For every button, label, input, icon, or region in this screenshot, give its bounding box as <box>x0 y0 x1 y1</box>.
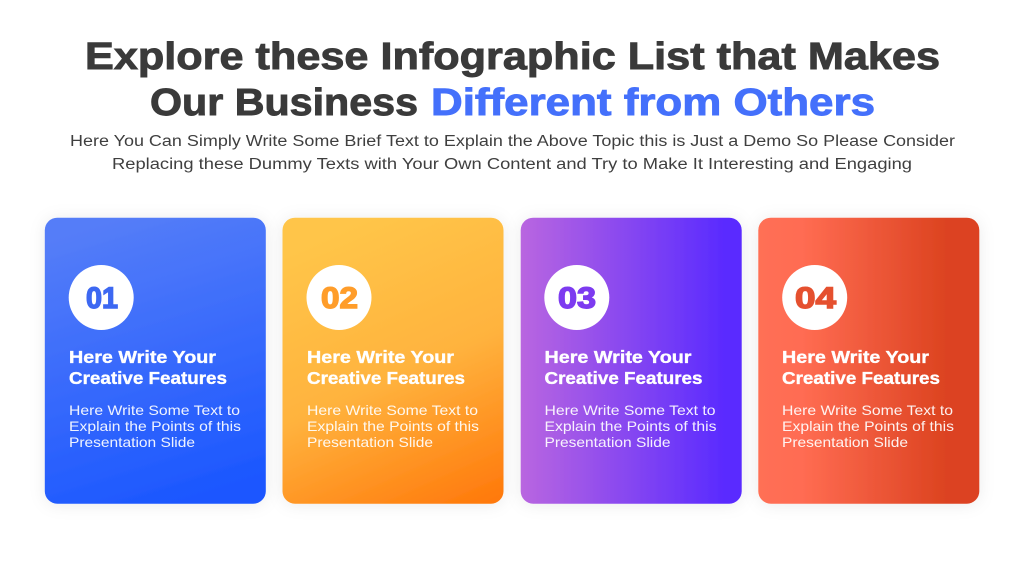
heading: card 01 <box>69 347 227 388</box>
subtitle text: Replacing these Dummy Texts with Your Own Content and Try to Make It Interesting and Engaging <box>112 156 912 173</box>
heading: card 02: Here Write Your <box>307 347 454 367</box>
title: Explore these Infographic List that Makes <box>85 36 940 78</box>
text block: card 03: Explain the Points of this <box>544 418 716 434</box>
subtitle text: Here You Can Simply Write Some Brief Text to Explain the Above Topic this is Just a Demo So Please Consider <box>70 133 955 150</box>
title <box>85 36 940 124</box>
subtitle text <box>70 133 955 173</box>
text block: card 04: Here Write Some Text to <box>782 402 953 418</box>
heading: card 04: Here Write Your <box>782 347 929 367</box>
icon: number badge 02: 02 <box>321 282 358 315</box>
text block: card 02: Presentation Slide <box>307 434 433 450</box>
icon: number badge 03 <box>544 265 609 330</box>
icon: number badge 03: 03 <box>558 282 596 315</box>
text block: card 04: Presentation Slide <box>782 434 908 450</box>
icon: number badge 04 <box>782 265 847 330</box>
heading: card 04: Creative Features <box>782 368 940 388</box>
icon: number badge 01: 01 <box>86 282 118 315</box>
text block: card 04: Explain the Points of this <box>782 418 954 434</box>
icon: number badge 01 <box>69 265 134 330</box>
icon: number badge 02 <box>306 265 372 330</box>
text block: card 02 <box>307 402 479 450</box>
title: Our Business <box>150 82 418 124</box>
panel: card 04 red <box>758 218 979 504</box>
panel: card 02 orange <box>282 218 504 504</box>
text block: card 03: Here Write Some Text to <box>544 402 716 418</box>
heading: card 03: Here Write Your <box>544 347 692 367</box>
text block: card 02: Explain the Points of this <box>307 418 479 434</box>
panel: card 01 blue <box>45 218 266 504</box>
heading: card 03 <box>544 347 703 388</box>
heading: card 02 <box>307 347 465 388</box>
text block: card 02: Here Write Some Text to <box>307 402 478 418</box>
heading: card 01: Creative Features <box>69 368 227 388</box>
text block: card 01 <box>69 402 241 450</box>
text block: card 04 <box>782 402 954 450</box>
text block: card 03 <box>544 402 716 450</box>
heading: card 02: Creative Features <box>307 368 465 388</box>
heading: card 01: Here Write Your <box>69 347 216 367</box>
text block: card 01: Here Write Some Text to <box>69 402 240 418</box>
title: Different from Others <box>431 82 875 124</box>
panel: card 03 purple <box>521 218 742 504</box>
heading: card 03: Creative Features <box>544 368 703 388</box>
text block: card 03: Presentation Slide <box>544 434 671 450</box>
text block: card 01: Presentation Slide <box>69 434 195 450</box>
icon: number badge 04: 04 <box>795 282 836 315</box>
text block: card 01: Explain the Points of this <box>69 418 241 434</box>
heading: card 04 <box>782 347 940 388</box>
